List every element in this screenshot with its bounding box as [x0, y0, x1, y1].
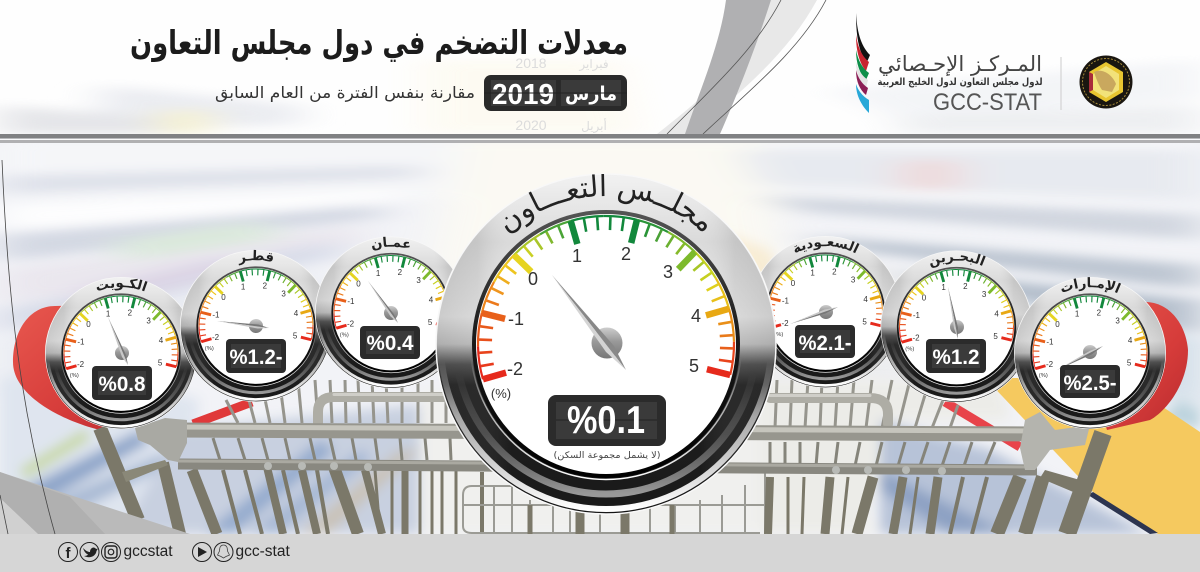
left red handle grip	[13, 305, 252, 430]
icon: twitter	[80, 542, 99, 562]
logo wordmark: GCC-STAT	[933, 89, 1042, 116]
gauge name: البحـرين	[930, 254, 986, 268]
needle: UAE	[1057, 345, 1103, 370]
needle: Saudi Arabia	[790, 305, 838, 324]
right red handle grip	[945, 302, 1188, 447]
gauge labels: 4	[429, 296, 434, 305]
gauge labels: 4	[1128, 336, 1133, 345]
gauge labels: 2	[263, 282, 268, 291]
value plate: UAE	[1060, 365, 1120, 398]
date flip plate: مارس	[565, 83, 617, 105]
gauge labels: -2	[347, 319, 355, 328]
gauge labels: -1	[782, 297, 790, 306]
handle: gccstat	[124, 543, 173, 560]
ghost previous month year	[515, 55, 609, 72]
gauge: Saudi Arabia	[761, 236, 895, 388]
gauge labels: 1	[941, 283, 946, 292]
value plate: Bahrain	[926, 339, 986, 373]
value plate: Qatar: %1.2-	[230, 346, 283, 369]
needle: Qatar	[217, 319, 269, 333]
gauge labels: 2	[963, 282, 968, 291]
gauge name: عمـان	[372, 236, 410, 250]
gauge labels: 1	[1075, 310, 1080, 319]
ghost previous month year: فبراير	[578, 57, 609, 72]
header white band	[0, 0, 1200, 134]
bottom-left gray shapes	[0, 472, 190, 534]
gauge labels: 1	[106, 310, 111, 319]
main handle rail	[173, 427, 1037, 434]
ghost next month year	[515, 117, 607, 134]
icon: GCC seal	[1080, 56, 1132, 108]
gauge labels: 4	[159, 336, 164, 345]
cart lower bars left	[100, 428, 482, 534]
icon: facebook: f	[66, 545, 72, 562]
gauge labels: -1	[212, 311, 220, 320]
gauge name: السعـودية	[794, 241, 860, 254]
needle: Bahrain	[948, 287, 964, 339]
gauge: Oman	[315, 236, 452, 388]
gauge labels: 0	[356, 279, 361, 288]
value plate: UAE: %2.5-	[1064, 372, 1117, 395]
value plate: Kuwait	[92, 366, 152, 400]
cart wires between rails	[213, 438, 995, 466]
value plate: GCC main	[548, 395, 666, 446]
gauge labels	[340, 268, 434, 339]
value plate: Bahrain: %1.2	[932, 346, 980, 369]
logo ribbon	[856, 13, 870, 113]
icon: snapchat	[214, 542, 233, 562]
ghost next month year: أبريل	[581, 118, 607, 134]
gauge labels: -1	[913, 311, 921, 320]
title: معدلات التضخم في دول مجلس التعاون	[130, 23, 628, 63]
gauge labels	[70, 309, 164, 379]
header rule	[0, 134, 1200, 143]
gauge labels: 2	[621, 244, 631, 264]
gauge labels: 0	[791, 279, 796, 288]
gauge labels	[774, 268, 868, 338]
lower rail	[178, 461, 1037, 475]
gauge labels: (%)	[491, 386, 511, 401]
gauge labels: 2	[398, 268, 403, 277]
shopping cart	[13, 302, 1188, 534]
needle: Kuwait	[108, 317, 129, 365]
gauge labels: 1	[376, 269, 381, 278]
gauge labels: 0	[221, 293, 226, 302]
date flip plate: 2019	[492, 79, 554, 111]
gauge: Qatar	[180, 250, 326, 402]
gauge labels: 3	[281, 290, 286, 299]
gauge: Kuwait	[45, 277, 194, 429]
gauge labels: -1	[77, 338, 85, 347]
gauge labels: 3	[416, 276, 421, 285]
ghost next month year: 2020	[515, 117, 547, 133]
value plate: GCC main: %0.1	[567, 399, 645, 442]
gauge name: مجلــس التعـــاون	[504, 174, 707, 234]
gauge labels: (%)	[340, 333, 349, 339]
gauge labels: -2	[912, 333, 920, 342]
gauge labels: 5	[428, 318, 433, 327]
gauge labels	[905, 282, 999, 353]
cart lower bars right	[530, 433, 1103, 534]
right rail connector	[1020, 412, 1090, 494]
gauge labels	[1039, 309, 1133, 379]
gauge labels: 1	[241, 283, 246, 292]
gauge labels: -1	[508, 309, 524, 329]
gauge labels: 2	[128, 309, 133, 318]
gauge labels: -2	[1046, 360, 1054, 369]
footer bar	[0, 534, 1200, 572]
gauge labels: 4	[691, 306, 701, 326]
gauge labels: 3	[663, 262, 673, 282]
gauge name: الكـويت	[96, 278, 148, 292]
ghost previous month year: 2018	[515, 55, 547, 71]
value plate: Saudi Arabia	[795, 325, 855, 358]
cart wires upper	[226, 380, 958, 428]
header decorative gray bands and lines	[657, 0, 826, 134]
gauge labels: (%)	[774, 332, 783, 338]
gauge labels	[491, 244, 701, 401]
date flip plate	[484, 75, 627, 111]
gauge labels: 5	[689, 356, 699, 376]
gauge labels: 5	[293, 331, 298, 340]
decorative thin curves	[0, 160, 55, 534]
left rail connector	[122, 418, 187, 482]
gauge labels: 3	[982, 290, 987, 299]
gauge labels: 1	[572, 246, 582, 266]
gauge labels: -1	[347, 297, 355, 306]
yellow floor stripe	[985, 378, 1200, 534]
note: excludes population total: (لا يشمل مجموعة السكن)	[554, 451, 660, 461]
basket wire grid center	[463, 470, 770, 534]
gauge labels: 2	[1097, 309, 1102, 318]
gauge labels: 4	[294, 309, 299, 318]
gauge labels: 4	[994, 310, 999, 319]
needle: Oman	[368, 281, 398, 323]
gauge labels: 5	[158, 358, 163, 367]
gauge labels: 0	[1055, 320, 1060, 329]
gauge labels	[205, 282, 299, 352]
icon: youtube	[192, 542, 212, 562]
logo: GCC-STAT	[856, 13, 1042, 116]
logo arabic subtitle: لدول مجلس التعاون لدول الخليج العربية	[878, 77, 1042, 88]
gauge labels: (%)	[205, 346, 214, 352]
gauge labels: 5	[993, 332, 998, 341]
needle: GCC main	[552, 275, 626, 370]
gauge name: قطـر	[238, 250, 273, 266]
logo arabic name: المـركـز الإحـصائي	[878, 52, 1042, 76]
gauge labels: 0	[922, 293, 927, 302]
gauge labels: 1	[810, 269, 815, 278]
value plate: Qatar	[226, 339, 286, 373]
gauge labels: 5	[862, 317, 867, 326]
gauge labels: 3	[1115, 317, 1120, 326]
gauge labels: 2	[832, 268, 837, 277]
value plate: Saudi Arabia: %2.1-	[798, 332, 852, 355]
social: gcc-stat	[192, 542, 290, 562]
gauge: GCC main	[435, 174, 777, 515]
gauge labels: (%)	[1039, 373, 1048, 379]
gauge labels: -2	[781, 319, 789, 328]
gauge labels: -2	[212, 333, 220, 342]
gauge: UAE	[1014, 277, 1166, 429]
gauge labels: 3	[851, 276, 856, 285]
social: gccstat	[58, 542, 173, 562]
gauge: Bahrain	[880, 250, 1030, 402]
gauge labels: -2	[77, 360, 85, 369]
value plate: Oman: %0.4	[366, 332, 414, 355]
gauge labels: 4	[863, 295, 868, 304]
gauge labels: 0	[86, 320, 91, 329]
value plate: Oman	[360, 326, 420, 359]
gauge labels: 0	[528, 269, 538, 289]
value plate: Kuwait: %0.8	[98, 373, 146, 396]
gauge labels: 3	[146, 317, 151, 326]
upper rails	[318, 394, 888, 424]
gauge labels: -1	[1046, 338, 1054, 347]
gauge labels: (%)	[70, 373, 79, 379]
logo divider	[1060, 57, 1062, 110]
gauge labels: (%)	[905, 347, 914, 353]
gauge labels: -2	[507, 359, 523, 379]
handle: gcc-stat	[236, 543, 290, 560]
icon: instagram	[102, 542, 120, 562]
gauge name: الإمـارات	[1062, 277, 1121, 293]
gauge labels: 5	[1127, 358, 1132, 367]
subtitle: مقارنة بنفس الفترة من العام السابق	[215, 83, 475, 103]
